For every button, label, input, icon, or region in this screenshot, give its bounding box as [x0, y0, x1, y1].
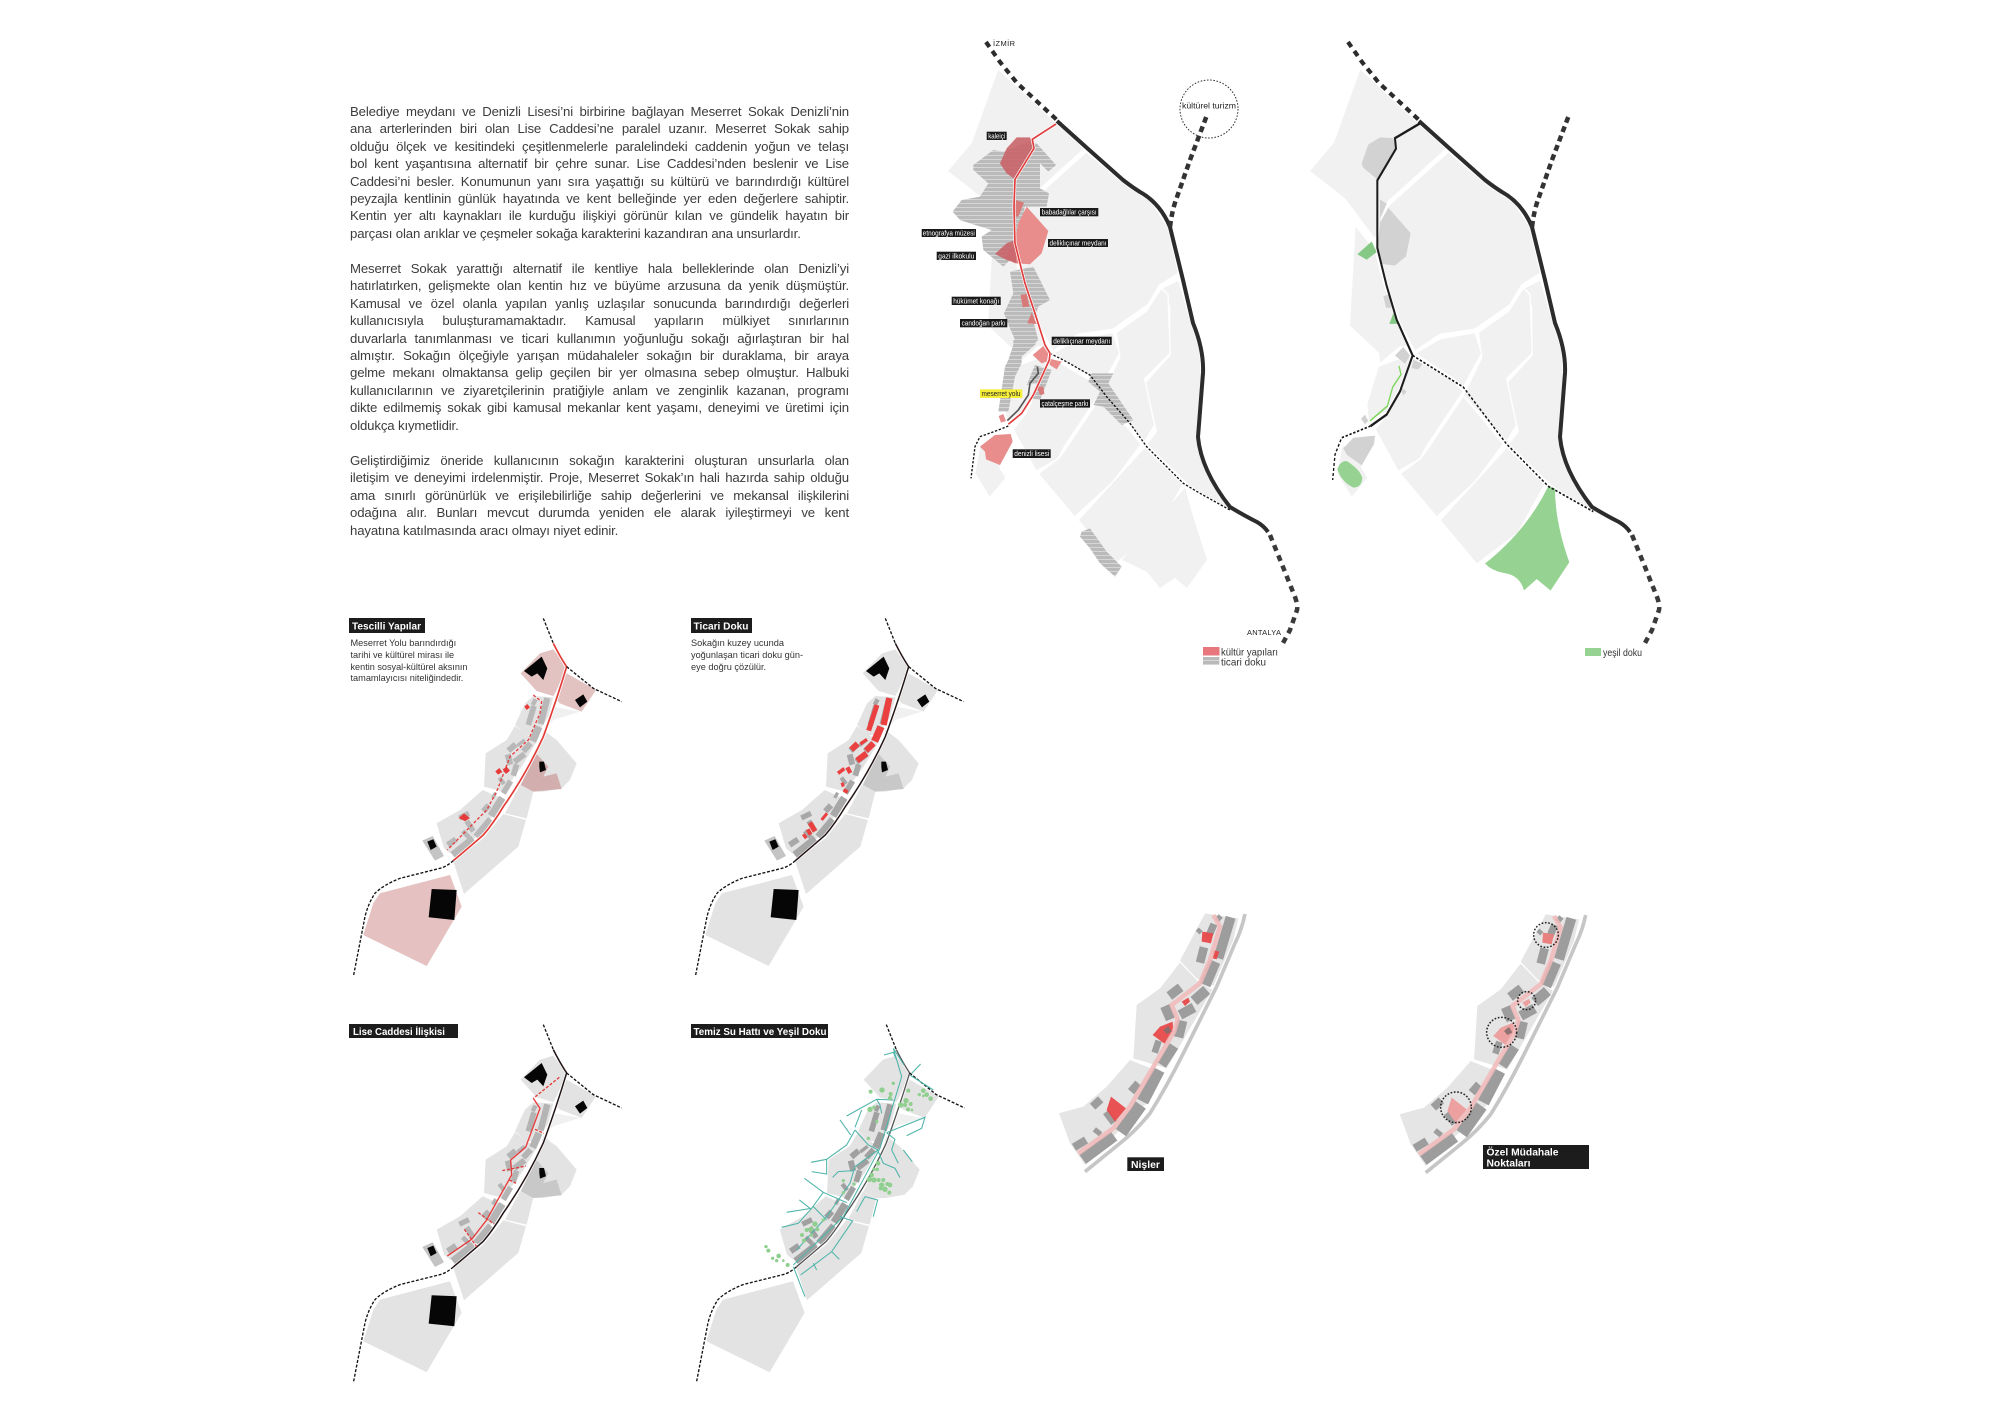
legend: culture and commerce: ticari doku [1221, 656, 1266, 668]
heading: Noktaları [1486, 1158, 1531, 1170]
water lines [782, 1048, 933, 1297]
city label: antalya: ANTALYA [1247, 628, 1281, 637]
body text: Meserret Sokak yarattığı alternatif ile kentliye hala belleklerinde olan Denizli’yi [350, 261, 849, 276]
legend: green: yeşil doku [1603, 647, 1642, 659]
description: eye doğru çözülür. [691, 662, 766, 672]
commercial hatch and culture shapes lower [971, 340, 1230, 577]
body text: iletişim ve deneyimi irdelenmiştir. Proje, Meserret Sokak’ın hali hazırda sahip olduğu [350, 470, 849, 485]
detail map: Nişler [1059, 913, 1245, 1172]
body text: duvarlarla tanımlanması ve ticari kullanımın yoğunluğu sokağı ağırlaştıran bir hal [350, 331, 849, 346]
map drawing [696, 1025, 965, 1383]
city blocks [947, 69, 1231, 588]
main road and branches [986, 42, 1297, 643]
heading [1483, 1145, 1589, 1170]
description: kentin sosyal-kültürel aksının [350, 662, 468, 672]
description: Sokağın kuzey ucunda [691, 638, 785, 648]
body text: odağına alır. Bunları mevcut durumda yeniden ele alarak iyileştirmeyi ve kent [350, 505, 849, 520]
body text: ama sınırlı görünürlük ve erişilebilirliğe sahip değerlerini ve mekansal ilişkilerini [350, 488, 849, 503]
city blocks [1309, 69, 1593, 564]
body text: Geliştirdiğimiz öneride kullanıcının sokağın karakterini oluşturan unsurlarla olan [350, 453, 849, 468]
map drawing [695, 618, 964, 977]
body text: Caddesi’ni besler. Konumunun yanı sıra yaşattığı su kültürü ve barındırdığı kültürel [350, 174, 849, 189]
body text: kullanıcısıyla buluşturamamaktadır. Kamusal yapıların mülkiyet sınırlarının [350, 313, 849, 328]
heading: Özel Müdahale [1486, 1146, 1559, 1158]
detail map: Özel Müdahale Noktaları [1400, 914, 1589, 1173]
red meserret road [1008, 124, 1056, 424]
body text: kullanıcılarının ve ziyaretçilerinin pratiğiyle anlam ve zenginlik kazanan, programı [350, 383, 849, 398]
small map: Tescilli Yapılar [349, 618, 622, 977]
map: green texture [1309, 42, 1659, 659]
place labels: babadağlılar çarşısı [1042, 208, 1097, 217]
trees [764, 1082, 933, 1267]
dashed intervention circles [1441, 923, 1558, 1123]
small map: Ticari Doku [691, 618, 964, 977]
place labels: etnografya müzesi [923, 228, 975, 238]
description: Meserret Yolu barındırdığı [350, 638, 456, 648]
body text: gelme mekanı olmaktansa gelip geçilen bir yer olmasına sebep olmuştur. Halbuki [350, 365, 849, 380]
main road and branches [1348, 42, 1659, 643]
circle: kültürel turizm: kültürel turizm [1182, 102, 1236, 110]
small map: Lise Caddesi İlişkisi [349, 1024, 622, 1383]
description: tamamlayıcısı niteliğindedir. [350, 673, 463, 683]
body text: Kamusal ve özel olanla yapılan yanlış uzlaşılar sonucunda barındırdığı değerleri [350, 296, 849, 311]
circle: kültürel turizm [1180, 80, 1238, 138]
heading: Tescilli Yapılar [352, 620, 421, 632]
heading [1127, 1157, 1164, 1171]
heading: Nişler [1131, 1159, 1160, 1171]
place labels: candoğan parkı [962, 319, 1006, 328]
place labels: kaleiçi [988, 131, 1005, 140]
body text: almıştır. Sokağın ölçeğiyle yarışan müdahaleler sokağın bir duraklama, bir araya [350, 348, 849, 363]
body text: olduğu ölçek ve kesitindeki çeşitlenmelerle paralelindeki caddenin yoğun ve telaşı [350, 139, 849, 154]
place labels: meserret yolu [982, 389, 1020, 398]
body text: Belediye meydanı ve Denizli Lisesi’ni birbirine bağlayan Meserret Sokak Denizli’nin [350, 104, 849, 119]
body text: hayatına katılmasında aracı olmayı niyet edinir. [350, 523, 618, 538]
legend: green [1585, 647, 1642, 659]
relation lines [447, 1077, 559, 1256]
map drawing [353, 618, 622, 977]
body text: bol kent yaşantısına alternatif bir çehre sunar. Lise Caddesi’nden beslenir ve Lise [350, 156, 849, 171]
description: tarihi ve kültürel mirası ile [350, 650, 454, 660]
body text: dikte edilmemiş sokak gibi kamusal mekanlar kent yaşamı, deneyimi ve üretimi için [350, 400, 849, 415]
body text: peyzajla kentlinin günlük hayatında ve kent belleğinde yer eden değerlere sahiptir. [350, 191, 849, 206]
heading: Temiz Su Hattı ve Yeşil Doku [694, 1026, 826, 1038]
place labels: gazi ilkokulu [938, 251, 974, 260]
body text: oldukça kıymetlidir. [350, 418, 459, 433]
place labels [922, 131, 1112, 458]
place labels: hükümet konağı [953, 296, 999, 305]
body text: ana arterlerinden biri olan Lise Caddesi’ne paralel uzanır. Meserret Sokak sahip [350, 121, 849, 136]
heading: Lise Caddesi İlişkisi [353, 1025, 445, 1038]
body text: Kentin yer altı kaynakları ile kurduğu ilişkiyi görünür kılan ve gündelik hayatın bir [350, 208, 849, 223]
place labels: denizli lisesi [1014, 449, 1050, 458]
green and grey areas with thin road [1333, 123, 1593, 591]
body text [350, 104, 850, 538]
map drawing [353, 1025, 622, 1383]
map: culture and commerce [922, 39, 1297, 668]
place labels: deliklıçınar meydanı [1050, 238, 1106, 248]
heading: Ticari Doku [694, 620, 748, 632]
description: yoğunlaşan ticari doku gün- [691, 650, 803, 660]
city label: izmir: İZMİR [993, 39, 1016, 48]
legend: culture and commerce: kültür yapıları [1221, 646, 1278, 658]
commercial hatch and culture shapes upper [953, 137, 1056, 360]
place labels: çatalçeşme parkı [1042, 399, 1088, 408]
body text: hatırlatırken, gelişmekte olan kentin hız ve büyüme arzusuna da yenik düşmüştür. [350, 278, 849, 293]
description [350, 638, 468, 683]
description [691, 638, 803, 672]
map drawing [1059, 913, 1245, 1172]
body text: parçası olan arıklar ve çeşmeler sokağa karakterini kazandıran ana unsurlardır. [350, 226, 801, 241]
map drawing [1400, 914, 1586, 1173]
small map: Temiz Su Hattı ve Yeşil Doku [691, 1024, 965, 1383]
legend: culture and commerce [1203, 646, 1278, 668]
place labels: deliklıçınar meydanı [1053, 336, 1110, 345]
